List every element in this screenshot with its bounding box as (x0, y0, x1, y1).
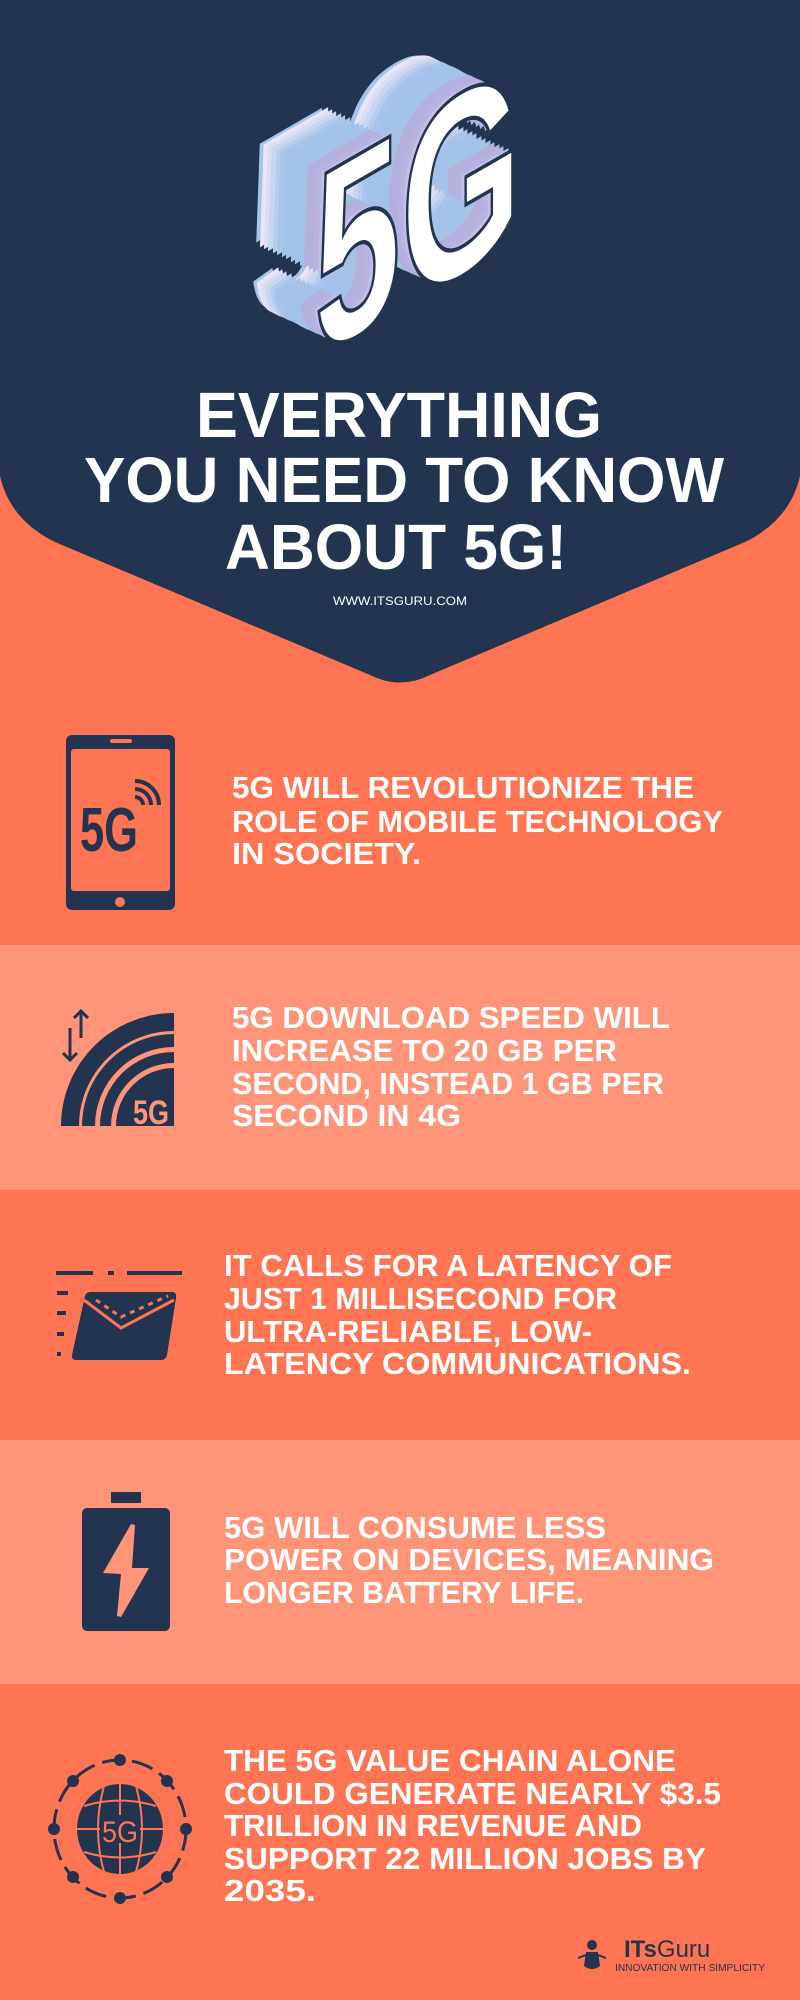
logo: ITsGuru: ITsGuru (624, 1936, 710, 1963)
icon: signal arcs 5G (61, 1011, 174, 1132)
text: download speed (232, 1000, 670, 1133)
text: power: 5G WILL CONSUME LESS (224, 1510, 606, 1545)
title: EVERYTHING (196, 379, 602, 451)
text: latency: ULTRA-RELIABLE, LOW- (224, 1314, 592, 1349)
panel: section 5 (48, 1743, 721, 1908)
logo: ITsGuru (578, 1936, 765, 1974)
panel: section 1 (66, 735, 723, 910)
text: latency: LATENCY COMMUNICATIONS. (224, 1346, 691, 1381)
text: latency: IT CALLS FOR A LATENCY OF (224, 1248, 672, 1283)
text: revolutionize: IN SOCIETY. (232, 836, 421, 871)
text: download speed: 5G DOWNLOAD SPEED WILL (232, 1000, 670, 1035)
text: power: LONGER BATTERY LIFE. (224, 1575, 584, 1610)
title: YOU NEED TO KNOW (84, 444, 725, 516)
icon: fast envelope (56, 1273, 182, 1360)
icon: 5G globe network (48, 1754, 192, 1904)
text: value chain: SUPPORT 22 MILLION JOBS BY (224, 1841, 706, 1876)
icon: 3D 5G graphic: 5G (296, 0, 504, 407)
text: value chain: 2035. (224, 1873, 316, 1908)
icon: 3D 5G graphic: 5G (292, 0, 500, 405)
icon: smartphone 5G (66, 735, 175, 910)
website url: WWW.ITSGURU.COM (333, 594, 467, 608)
text: value chain: TRILLION IN REVENUE AND (224, 1808, 642, 1843)
panel: section 4 background (0, 1440, 800, 1684)
icon: 3D 5G graphic: 5G (283, 0, 491, 401)
title: ABOUT 5G! (225, 511, 567, 583)
icon: 3D 5G graphic: 5G (278, 0, 486, 398)
text: value chain (224, 1743, 721, 1908)
text: revolutionize: ROLE OF MOBILE TECHNOLOGY (232, 804, 723, 839)
icon: battery (82, 1492, 170, 1631)
text: download speed: SECOND IN 4G (232, 1098, 461, 1133)
text: revolutionize: 5G WILL REVOLUTIONIZE THE (232, 770, 694, 805)
panel: section 2 background (0, 945, 800, 1190)
text: latency (224, 1248, 691, 1381)
text: value chain: THE 5G VALUE CHAIN ALONE (224, 1743, 676, 1778)
logo: ITsGuru: INNOVATION WITH SIMPLICITY (615, 1963, 765, 1974)
icon: 5G globe network: 5G (102, 1816, 138, 1849)
text: latency: JUST 1 MILLISECOND FOR (224, 1281, 617, 1316)
text: download speed: SECOND, INSTEAD 1 GB PER (232, 1066, 664, 1101)
text: power (224, 1510, 714, 1610)
panel: section 2 (61, 1000, 670, 1133)
icon: signal arcs 5G: 5G (133, 1094, 169, 1132)
icon: 3D 5G graphic: 5G (305, 1, 513, 411)
text: value chain: COULD GENERATE NEARLY $3.5 (224, 1776, 721, 1811)
icon: 3D 5G graphic: 5G (301, 0, 509, 409)
text: revolutionize (232, 770, 723, 871)
panel: section 3 (56, 1248, 691, 1381)
text: download speed: INCREASE TO 20 GB PER (232, 1033, 617, 1068)
icon: 3D 5G graphic: 5G (314, 5, 522, 415)
title (84, 379, 725, 583)
panel: section 4 (82, 1492, 714, 1631)
icon: 3D 5G graphic: 5G (287, 0, 495, 403)
header banner (0, 0, 800, 682)
icon: smartphone 5G: 5G (80, 796, 138, 865)
text: power: POWER ON DEVICES, MEANING (224, 1542, 714, 1577)
icon: 3D 5G graphic: 5G (310, 3, 518, 413)
